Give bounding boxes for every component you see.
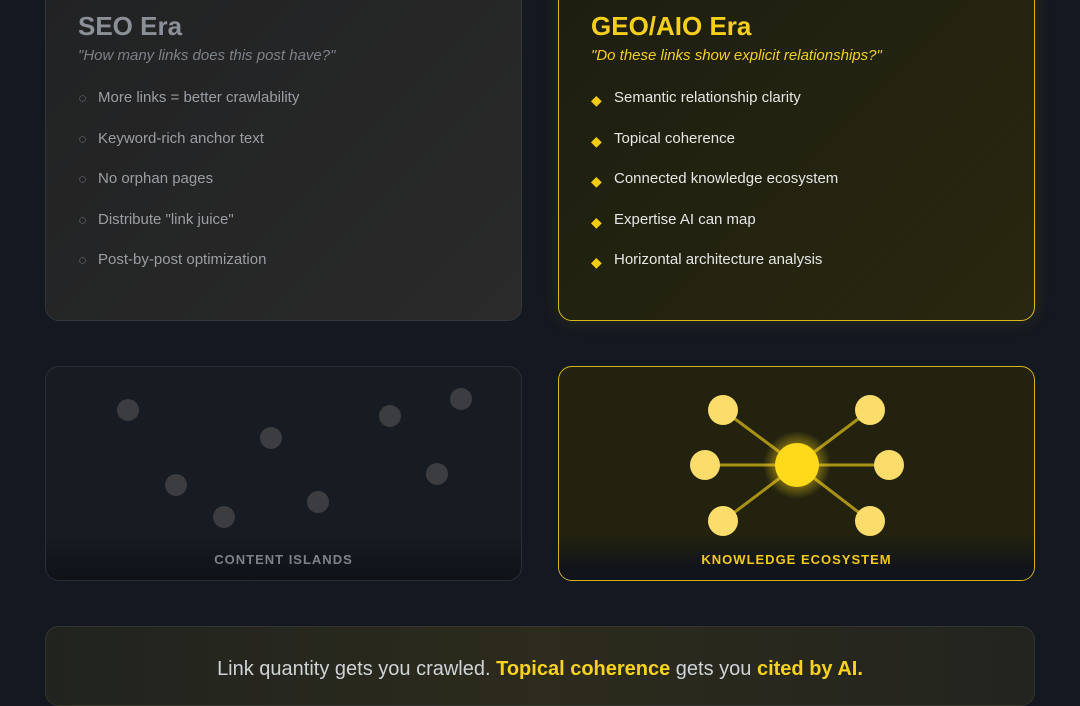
label: KNOWLEDGE ECOSYSTEM xyxy=(701,552,892,567)
panel: content islands xyxy=(45,366,522,581)
list: SEO points: Distribute "link juice" xyxy=(98,210,234,228)
list: SEO points: Post-by-post optimization xyxy=(98,251,266,268)
list: SEO points: No orphan pages xyxy=(98,170,213,187)
list: GEO points: Topical coherence xyxy=(614,130,735,146)
list: SEO points: Keyword-rich anchor text xyxy=(98,130,264,146)
diagram: scattered dots xyxy=(117,388,472,528)
panel: SEO era xyxy=(45,0,522,321)
list: SEO points xyxy=(78,89,300,269)
list: GEO points: Horizontal architecture analysis xyxy=(614,251,822,268)
list: GEO points: ◆ xyxy=(591,132,602,148)
list: SEO points: ○ xyxy=(78,252,87,269)
list: GEO points: Expertise AI can map xyxy=(614,210,756,228)
list: SEO points: More links = better crawlability xyxy=(98,89,299,106)
list: GEO points: Semantic relationship clarity xyxy=(614,89,801,106)
panel: knowledge ecosystem xyxy=(558,366,1035,581)
list: SEO points: ○ xyxy=(78,90,87,107)
heading: GEO/AIO Era: GEO/AIO Era xyxy=(591,11,751,41)
list: GEO points: ◆ xyxy=(591,173,602,189)
panel: GEO/AIO era xyxy=(558,0,1035,321)
list: GEO points: Connected knowledge ecosystem xyxy=(614,170,838,187)
list: SEO points: ○ xyxy=(78,130,87,148)
list: SEO points: ○ xyxy=(78,212,87,228)
label xyxy=(46,536,521,580)
list: GEO points xyxy=(591,89,838,270)
heading: SEO Era: SEO Era xyxy=(78,11,182,41)
banner: conclusion: Link quantity gets you crawled. Topical coherence gets you cited by AI. xyxy=(217,658,863,680)
label: CONTENT ISLANDS xyxy=(214,552,353,567)
subtitle: "How many links does this post have?" xyxy=(78,47,335,64)
subtitle: "Do these links show explicit relationships?" xyxy=(591,47,882,64)
banner: conclusion xyxy=(45,626,1035,706)
list: GEO points: ◆ xyxy=(591,254,602,270)
list: SEO points: ○ xyxy=(78,171,87,188)
list: GEO points: ◆ xyxy=(591,92,602,108)
diagram: hub network xyxy=(690,395,904,536)
list: GEO points: ◆ xyxy=(591,214,602,230)
label xyxy=(559,536,1034,580)
